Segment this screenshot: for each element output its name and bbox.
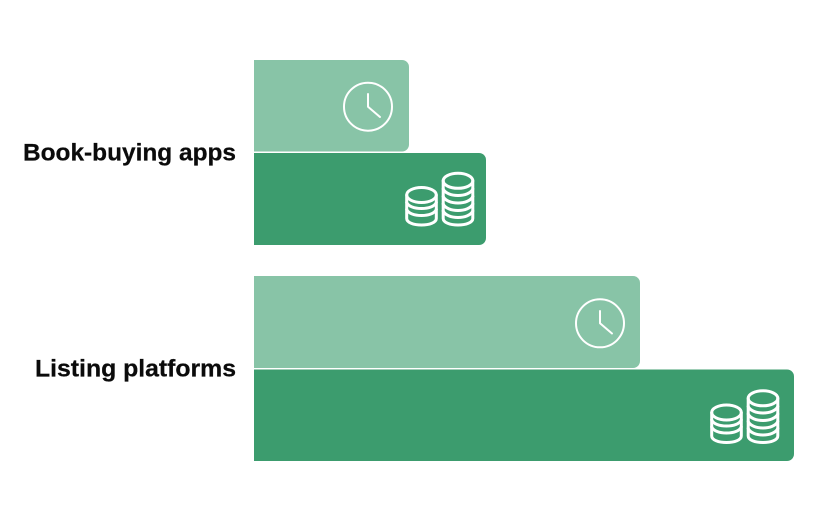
row: Listing platforms [35,276,794,461]
row: Book-buying apps [23,60,486,245]
icon: coins [712,391,778,442]
icon: clock [344,83,392,131]
label: Listing platforms: Listing platforms [35,356,236,382]
icon: clock [576,299,624,347]
bar: cost, book-buying apps [254,153,486,245]
bar: time, listing platforms [254,276,640,368]
bar: time, book-buying apps [254,60,409,152]
bar: cost, listing platforms [254,370,794,461]
icon: coins [407,173,473,225]
label: Book-buying apps: Book-buying apps [23,140,236,166]
